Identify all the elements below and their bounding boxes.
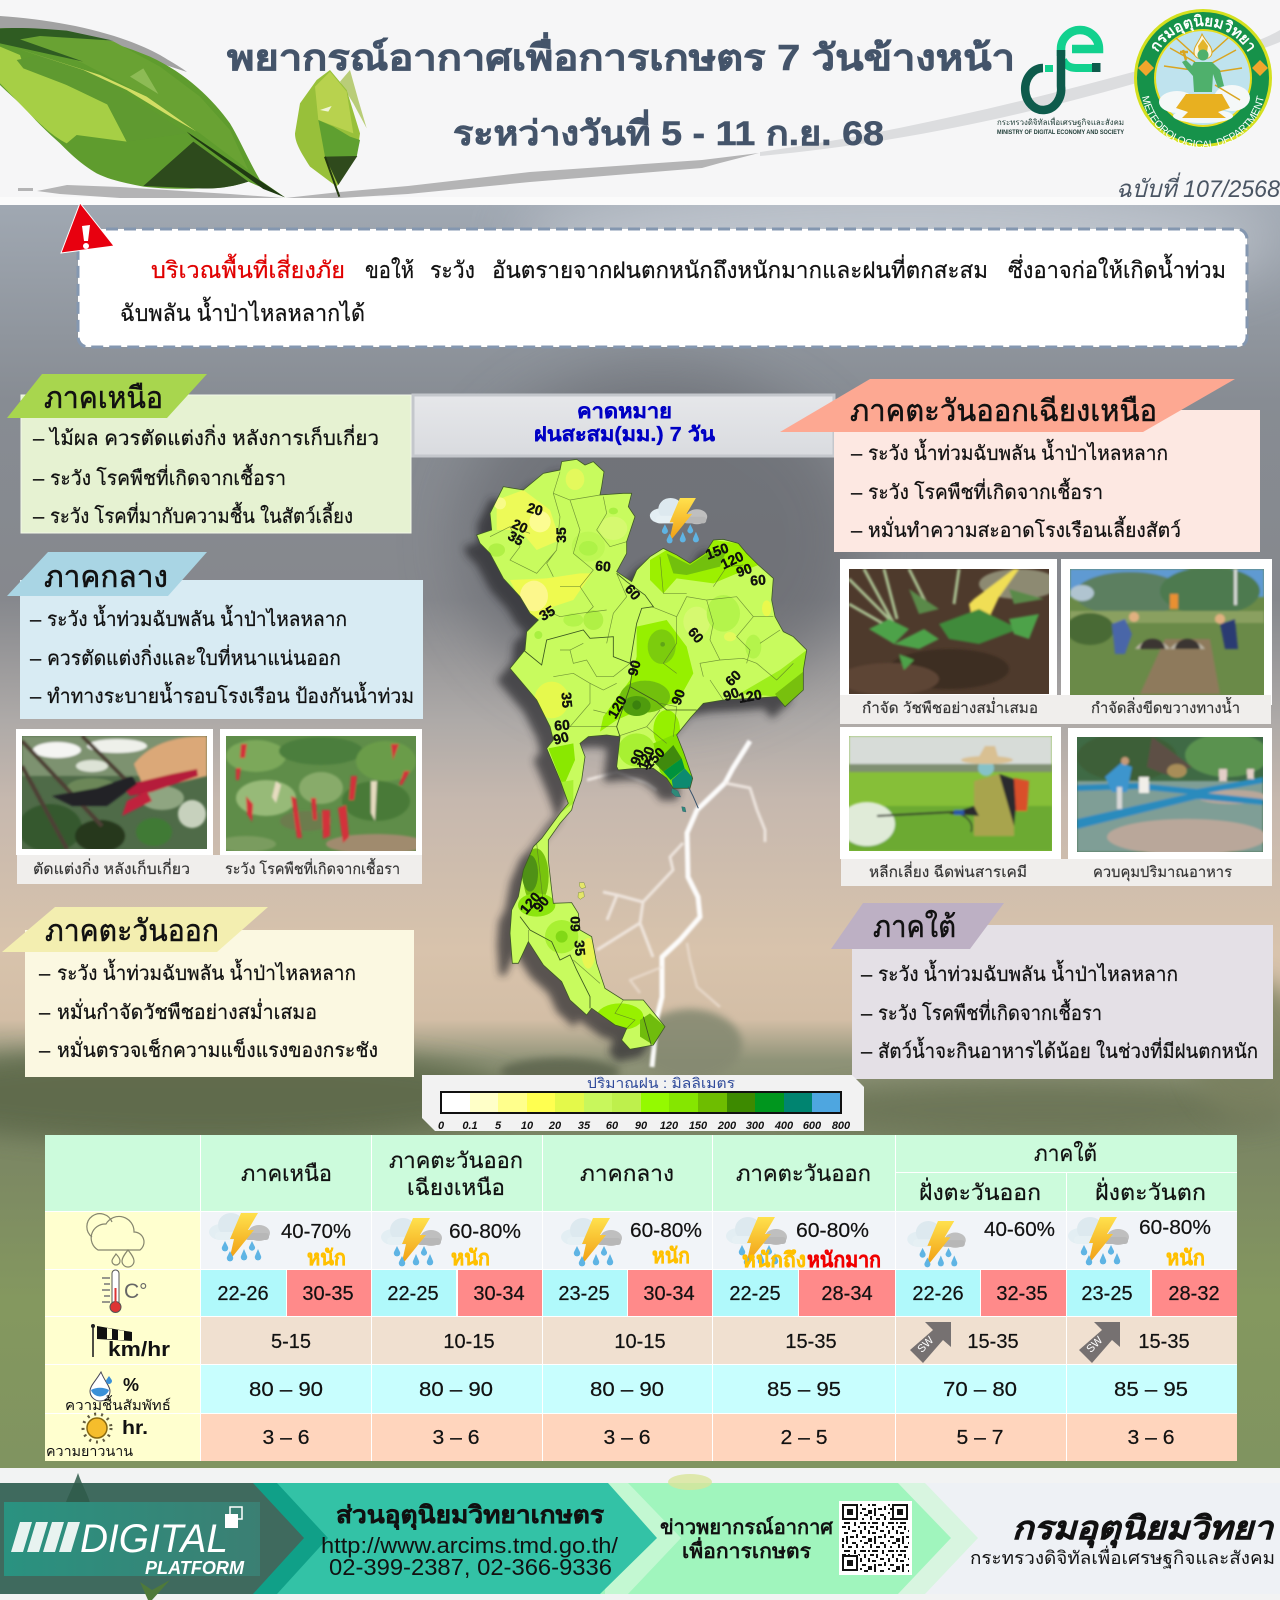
row: wind speed: 10-15 bbox=[614, 1331, 666, 1353]
caption strip: left photos: ตัดแต่งกิ่ง หลังเก็บเกี่ยว bbox=[33, 858, 190, 878]
map: 7-day accumulated rainfall over Thailand: 120 bbox=[516, 889, 544, 917]
subtitle: date range: ระหว่างวันที่ 5 - 11 ก.ย. 68 bbox=[453, 109, 884, 153]
panel: north-eastern region bbox=[780, 379, 1260, 552]
footer: contact band: กรมอุตุนิยมวิทยา bbox=[1012, 1510, 1275, 1548]
map: 7-day accumulated rainfall over Thailand: 60 bbox=[567, 916, 583, 932]
logo: Meteorological Department seal bbox=[1134, 9, 1272, 148]
panel: north-eastern region: – bbox=[851, 520, 863, 542]
map: 7-day accumulated rainfall over Thailand: 35 bbox=[571, 940, 589, 957]
legend: rainfall colour scale: 600 bbox=[803, 1120, 822, 1132]
panel: southern region: – bbox=[861, 964, 873, 986]
panel: central region: ระวัง น้ำท่วมฉับพลัน น้ำป่าไหลหลาก bbox=[47, 605, 347, 631]
map: 7-day accumulated rainfall over Thailand: 35 bbox=[505, 527, 527, 549]
row: temperature: 28-34 bbox=[821, 1283, 873, 1305]
caption strip: north-east top photos: กำจัดสิ่งขีดขวางทางน้ำ bbox=[1091, 697, 1240, 717]
row: temperature: 23-25 bbox=[1081, 1283, 1133, 1305]
footer: contact band: ข่าวพยากรณ์อากาศ bbox=[660, 1516, 834, 1539]
row: sunshine duration bbox=[45, 1414, 1237, 1461]
row: wind speed: km/hr bbox=[108, 1339, 170, 1361]
panel: eastern region: หมั่นตรวจเช็กความแข็งแรงของกระชัง bbox=[57, 1036, 378, 1062]
legend: rainfall colour scale: 90 bbox=[635, 1120, 648, 1132]
photo: chilli plants with fungal disease bbox=[216, 729, 426, 855]
legend: rainfall colour scale: 60 bbox=[606, 1120, 619, 1132]
footer: contact band: http://www.arcims.tmd.go.th/ bbox=[321, 1533, 619, 1558]
panel: eastern region: – bbox=[39, 1040, 51, 1062]
caption strip: left photos bbox=[17, 855, 422, 884]
row: relative humidity bbox=[45, 1365, 1237, 1413]
map: 7-day accumulated rainfall over Thailand: 90 bbox=[668, 687, 688, 707]
legend: rainfall colour scale: 150 bbox=[689, 1120, 708, 1132]
panel: southern region bbox=[831, 903, 1273, 1079]
row: wind speed: SW bbox=[915, 1334, 937, 1355]
panel: map heading bbox=[413, 395, 834, 456]
row: rain chance and intensity bbox=[45, 1212, 1237, 1272]
panel: eastern region: หมั่นกำจัดวัชพืชอย่างสม่ำเสมอ bbox=[57, 998, 317, 1024]
row: temperature: 30-34 bbox=[473, 1283, 525, 1305]
panel: southern region: ภาคใต้ bbox=[873, 910, 956, 944]
row: relative humidity: 85 – 95 bbox=[767, 1379, 841, 1401]
row: sunshine duration: 3 – 6 bbox=[1128, 1427, 1174, 1449]
logo: digital platform: PLATFORM bbox=[145, 1558, 245, 1578]
panel: southern region: ระวัง โรคพืชที่เกิดจากเชื้อรา bbox=[878, 999, 1102, 1025]
row: temperature: 22-26 bbox=[912, 1283, 964, 1305]
row: temperature bbox=[45, 1270, 1237, 1316]
legend: rainfall colour scale: 300 bbox=[746, 1120, 765, 1132]
table: regional forecast bbox=[45, 1135, 1237, 1461]
caption strip: north-east lower photos bbox=[841, 859, 1272, 886]
panel: southern region: ระวัง น้ำท่วมฉับพลัน น้ำป่าไหลหลาก bbox=[878, 960, 1178, 986]
caption strip: left photos: ระวัง โรคพืชที่เกิดจากเชื้อรา bbox=[225, 858, 400, 878]
row: relative humidity: 80 – 90 bbox=[590, 1379, 664, 1401]
panel: central region: ควรตัดแต่งกิ่งและใบที่หนาแน่นออก bbox=[47, 644, 341, 670]
panel: southern region: สัตว์น้ำจะกินอาหารได้น้อย ในช่วงที่มีฝนตกหนัก bbox=[878, 1037, 1258, 1063]
logo: Meteorological Department seal: กรมอุตุนิยมวิทยา bbox=[1152, 14, 1254, 52]
panel: northern region: ระวัง โรคที่มากับความชื้น ในสัตว์เลี้ยง bbox=[50, 502, 353, 528]
panel: risk warning: ขอให้ bbox=[365, 257, 414, 283]
map: 7-day accumulated rainfall over Thailand: 120 bbox=[718, 548, 746, 572]
map: 7-day accumulated rainfall over Thailand: 90 bbox=[734, 560, 754, 580]
row: sunshine duration: 3 – 6 bbox=[432, 1427, 480, 1449]
row: temperature: 32-35 bbox=[996, 1283, 1048, 1305]
legend: rainfall colour scale: ปริมาณฝน : มิลลิเมตร bbox=[587, 1075, 736, 1091]
logo: digital platform bbox=[4, 1502, 260, 1578]
footer: contact band: เพื่อการเกษตร bbox=[682, 1536, 811, 1563]
row: rain chance and intensity: 60-80% bbox=[1139, 1217, 1211, 1239]
row: temperature: 22-26 bbox=[217, 1283, 269, 1305]
panel: map heading: ฝนสะสม(มม.) 7 วัน bbox=[534, 424, 715, 446]
row: temperature: 30-35 bbox=[302, 1283, 354, 1305]
row: rain chance and intensity: หนักถึง bbox=[742, 1249, 806, 1272]
row: relative humidity: 85 – 95 bbox=[1114, 1379, 1188, 1401]
legend: rainfall colour scale: 35 bbox=[578, 1120, 591, 1132]
panel: risk warning: อันตรายจากฝนตกหนักถึงหนักมากและฝนที่ตกสะสม bbox=[492, 254, 988, 283]
panel: central region: ทำทางระบายน้ำรอบโรงเรือน ป้องกันน้ำท่วม bbox=[47, 682, 414, 708]
panel: risk warning bbox=[78, 229, 1247, 347]
legend: rainfall colour scale: 0.1 bbox=[462, 1120, 478, 1132]
icon: warning triangle bbox=[61, 203, 114, 253]
row: header bbox=[45, 1135, 1237, 1211]
title: พยากรณ์อากาศเพื่อการเกษตร 7 วันข้างหน้า bbox=[227, 32, 1015, 78]
row: sunshine duration: ความยาวนาน bbox=[46, 1443, 133, 1459]
row: temperature: 22-25 bbox=[729, 1283, 781, 1305]
map: 7-day accumulated rainfall over Thailand: 150 bbox=[703, 539, 731, 563]
legend: rainfall colour scale: 5 bbox=[495, 1120, 502, 1132]
row: header: ฝั่งตะวันตก bbox=[1095, 1177, 1206, 1205]
row: relative humidity: 80 – 90 bbox=[249, 1379, 323, 1401]
map: 7-day accumulated rainfall over Thailand: 60 bbox=[622, 581, 644, 603]
panel: risk warning: บริเวณพื้นที่เสี่ยงภัย bbox=[151, 254, 345, 283]
panel: north-eastern region: – bbox=[851, 482, 863, 504]
map: 7-day accumulated rainfall over Thailand: 90 bbox=[627, 747, 647, 767]
row: sunshine duration: 2 – 5 bbox=[780, 1427, 828, 1449]
header band bbox=[0, 0, 1280, 205]
panel: north-eastern region: ภาคตะวันออกเฉียงเหนือ bbox=[850, 395, 1157, 428]
map: 7-day accumulated rainfall over Thailand: 120 bbox=[604, 693, 630, 721]
map: 7-day accumulated rainfall over Thailand: 20 bbox=[510, 515, 531, 537]
legend: rainfall colour scale: 20 bbox=[548, 1120, 562, 1132]
legend: rainfall colour scale bbox=[422, 1075, 864, 1132]
icon: storm cloud on map bbox=[650, 498, 707, 543]
panel: north-eastern region: หมั่นทำความสะอาดโรงเรือนเลี้ยงสัตว์ bbox=[868, 516, 1181, 542]
panel: eastern region: ระวัง น้ำท่วมฉับพลัน น้ำป่าไหลหลาก bbox=[57, 959, 356, 985]
panel: map heading: คาดหมาย bbox=[577, 401, 672, 423]
logo: Meteorological Department seal: METEOROLOGICAL DEPARTMENT bbox=[1142, 96, 1264, 148]
legend: rainfall colour scale: 120 bbox=[660, 1120, 679, 1132]
panel: risk warning: ระวัง bbox=[430, 257, 475, 283]
panel: eastern region: ภาคตะวันออก bbox=[45, 915, 219, 948]
row: sunshine duration: hr. bbox=[122, 1418, 148, 1439]
row: rain chance and intensity: 40-60% bbox=[984, 1219, 1055, 1241]
row: wind speed: 10-15 bbox=[443, 1331, 495, 1353]
row: temperature: 28-32 bbox=[1168, 1283, 1220, 1305]
logo: Ministry of Digital Economy and Society: MINISTRY OF DIGITAL ECONOMY AND SOCIETY bbox=[997, 130, 1124, 136]
panel: northern region: ภาคเหนือ bbox=[44, 382, 163, 415]
panel: northern region: ไม้ผล ควรตัดแต่งกิ่ง หลังการเก็บเกี่ยว bbox=[48, 424, 379, 450]
icon: QR code bbox=[839, 1501, 912, 1575]
icon: large green leaf bbox=[0, 28, 285, 197]
row: sunshine duration: 5 – 7 bbox=[956, 1427, 1004, 1449]
photo: weeding bbox=[839, 559, 1059, 702]
row: temperature: 22-25 bbox=[387, 1283, 439, 1305]
row: temperature: C° bbox=[124, 1280, 148, 1303]
logo: Ministry of Digital Economy and Society: กระทรวงดิจิทัลเพื่อเศรษฐกิจและสังคม bbox=[997, 116, 1124, 127]
row: header: ภาคตะวันออก bbox=[736, 1161, 871, 1186]
caption strip: north-east top photos: กำจัด วัชพืชอย่างสม่ำเสมอ bbox=[862, 697, 1038, 717]
row: rain chance and intensity: หนัก bbox=[307, 1247, 346, 1270]
panel: north-eastern region: – bbox=[851, 443, 863, 465]
logo: Ministry of Digital Economy and Society bbox=[997, 30, 1124, 136]
footer: contact band bbox=[0, 1468, 1280, 1600]
panel: risk warning: ฉับพลัน น้ำป่าไหลหลากได้ bbox=[120, 297, 365, 326]
map: 7-day accumulated rainfall over Thailand bbox=[460, 450, 820, 1061]
panel: central region bbox=[7, 552, 423, 719]
row: rain chance and intensity: 60-80% bbox=[449, 1221, 521, 1243]
legend: rainfall colour scale: 10 bbox=[521, 1120, 534, 1132]
panel: northern region bbox=[7, 374, 411, 533]
photo: pruning after harvest bbox=[16, 729, 213, 855]
row: wind speed: 15-35 bbox=[967, 1331, 1019, 1353]
map: 7-day accumulated rainfall over Thailand: 35 bbox=[558, 692, 576, 709]
map: 7-day accumulated rainfall over Thailand: 20 bbox=[525, 499, 545, 519]
row: rain chance and intensity: 40-70% bbox=[281, 1221, 351, 1243]
map: 7-day accumulated rainfall over Thailand: 90 bbox=[624, 658, 644, 678]
panel: eastern region: – bbox=[39, 1002, 51, 1024]
row: wind speed: 15-35 bbox=[785, 1331, 837, 1353]
logo: digital platform: DIGITAL bbox=[80, 1517, 228, 1561]
panel: north-eastern region: ระวัง โรคพืชที่เกิดจากเชื้อรา bbox=[868, 478, 1103, 504]
row: temperature: 30-34 bbox=[643, 1283, 695, 1305]
legend: rainfall colour scale: 400 bbox=[774, 1120, 794, 1132]
legend: rainfall colour scale: 200 bbox=[717, 1120, 737, 1132]
footer: contact band: กระทรวงดิจิทัลเพื่อเศรษฐกิจและสังคม bbox=[970, 1545, 1275, 1569]
row: rain chance and intensity: 60-80% bbox=[796, 1220, 869, 1242]
panel: northern region: – bbox=[33, 506, 45, 528]
panel: central region: ภาคกลาง bbox=[44, 561, 168, 594]
row: sunshine duration: 3 – 6 bbox=[604, 1427, 650, 1449]
row: header: ภาคตะวันออก bbox=[389, 1148, 523, 1173]
row: rain chance and intensity: หนัก bbox=[451, 1247, 490, 1270]
map: 7-day accumulated rainfall over Thailand: 90 bbox=[721, 684, 741, 704]
row: header: เฉียงเหนือ bbox=[407, 1175, 505, 1200]
map: 7-day accumulated rainfall over Thailand: 90 bbox=[530, 893, 552, 915]
photo: avoid spraying chemicals bbox=[839, 727, 1061, 859]
panel: northern region: – bbox=[33, 468, 45, 490]
panel: risk warning: ซึ่งอาจก่อให้เกิดน้ำท่วม bbox=[1008, 254, 1226, 283]
footer: contact band: ส่วนอุตุนิยมวิทยาเกษตร bbox=[336, 1502, 604, 1531]
panel: northern region: ระวัง โรคพืชที่เกิดจากเชื้อรา bbox=[50, 464, 286, 490]
row: relative humidity: 80 – 90 bbox=[419, 1379, 493, 1401]
map: 7-day accumulated rainfall over Thailand: 60 bbox=[595, 557, 612, 575]
caption strip: north-east lower photos: หลีกเลี่ยง ฉีดพ่นสารเคมี bbox=[869, 861, 1027, 881]
row: relative humidity: 70 – 80 bbox=[943, 1379, 1017, 1401]
caption strip: north-east top photos bbox=[840, 695, 1271, 724]
map: 7-day accumulated rainfall over Thailand: 60 bbox=[722, 667, 744, 689]
row: rain chance and intensity: หนัก bbox=[1166, 1247, 1205, 1270]
map: 7-day accumulated rainfall over Thailand: 35 bbox=[536, 602, 558, 624]
photo: clearing waterway bbox=[1061, 559, 1272, 705]
map: 7-day accumulated rainfall over Thailand: 60 bbox=[685, 624, 707, 646]
photo: control feed quantity bbox=[1068, 728, 1272, 859]
row: wind speed: SW bbox=[1084, 1334, 1106, 1355]
row: rain chance and intensity: หนัก bbox=[652, 1245, 690, 1268]
icon: small green leaf bbox=[295, 70, 367, 197]
map: 7-day accumulated rainfall over Thailand: 120 bbox=[634, 744, 658, 772]
map: 7-day accumulated rainfall over Thailand: 60 bbox=[554, 716, 571, 734]
legend: rainfall colour scale: 800 bbox=[832, 1120, 851, 1132]
caption strip: north-east lower photos: ควบคุมปริมาณอาหาร bbox=[1093, 864, 1232, 882]
map: 7-day accumulated rainfall over Thailand: 120 bbox=[737, 686, 763, 706]
row: sunshine duration: 3 – 6 bbox=[262, 1427, 310, 1449]
panel: central region: – bbox=[30, 686, 42, 708]
panel: northern region: – bbox=[33, 428, 45, 450]
row: header: ภาคกลาง bbox=[580, 1161, 674, 1186]
row: relative humidity: % bbox=[123, 1375, 139, 1395]
row: rain chance and intensity: 60-80% bbox=[630, 1220, 702, 1242]
footer: contact band: 02-399-2387, 02-366-9336 bbox=[329, 1554, 612, 1580]
map: 7-day accumulated rainfall over Thailand: 90 bbox=[551, 728, 571, 748]
panel: southern region: – bbox=[861, 1041, 873, 1063]
row: temperature: 23-25 bbox=[558, 1283, 610, 1305]
panel: eastern region bbox=[2, 907, 414, 1077]
row: header: ฝั่งตะวันออก bbox=[919, 1177, 1041, 1205]
row: rain chance and intensity: หนักมาก bbox=[807, 1249, 881, 1272]
panel: north-eastern region: ระวัง น้ำท่วมฉับพลัน น้ำป่าไหลหลาก bbox=[868, 439, 1168, 465]
legend: rainfall colour scale: 0 bbox=[438, 1120, 445, 1132]
map: 7-day accumulated rainfall over Thailand: 60 bbox=[750, 571, 767, 589]
row: header: ภาคใต้ bbox=[1034, 1141, 1097, 1166]
map: 7-day accumulated rainfall over Thailand: 35 bbox=[553, 527, 569, 543]
panel: central region: – bbox=[30, 609, 42, 631]
row: wind speed: 5-15 bbox=[271, 1331, 311, 1353]
row: header: ภาคเหนือ bbox=[241, 1161, 332, 1186]
panel: eastern region: – bbox=[39, 963, 51, 985]
row: relative humidity: ความชื้นสัมพัทธ์ bbox=[65, 1395, 171, 1413]
panel: southern region: – bbox=[861, 1003, 873, 1025]
map: 7-day accumulated rainfall over Thailand: 150 bbox=[640, 744, 668, 772]
row: wind speed bbox=[45, 1317, 1237, 1364]
row: wind speed: 15-35 bbox=[1138, 1331, 1190, 1353]
panel: central region: – bbox=[30, 648, 42, 670]
